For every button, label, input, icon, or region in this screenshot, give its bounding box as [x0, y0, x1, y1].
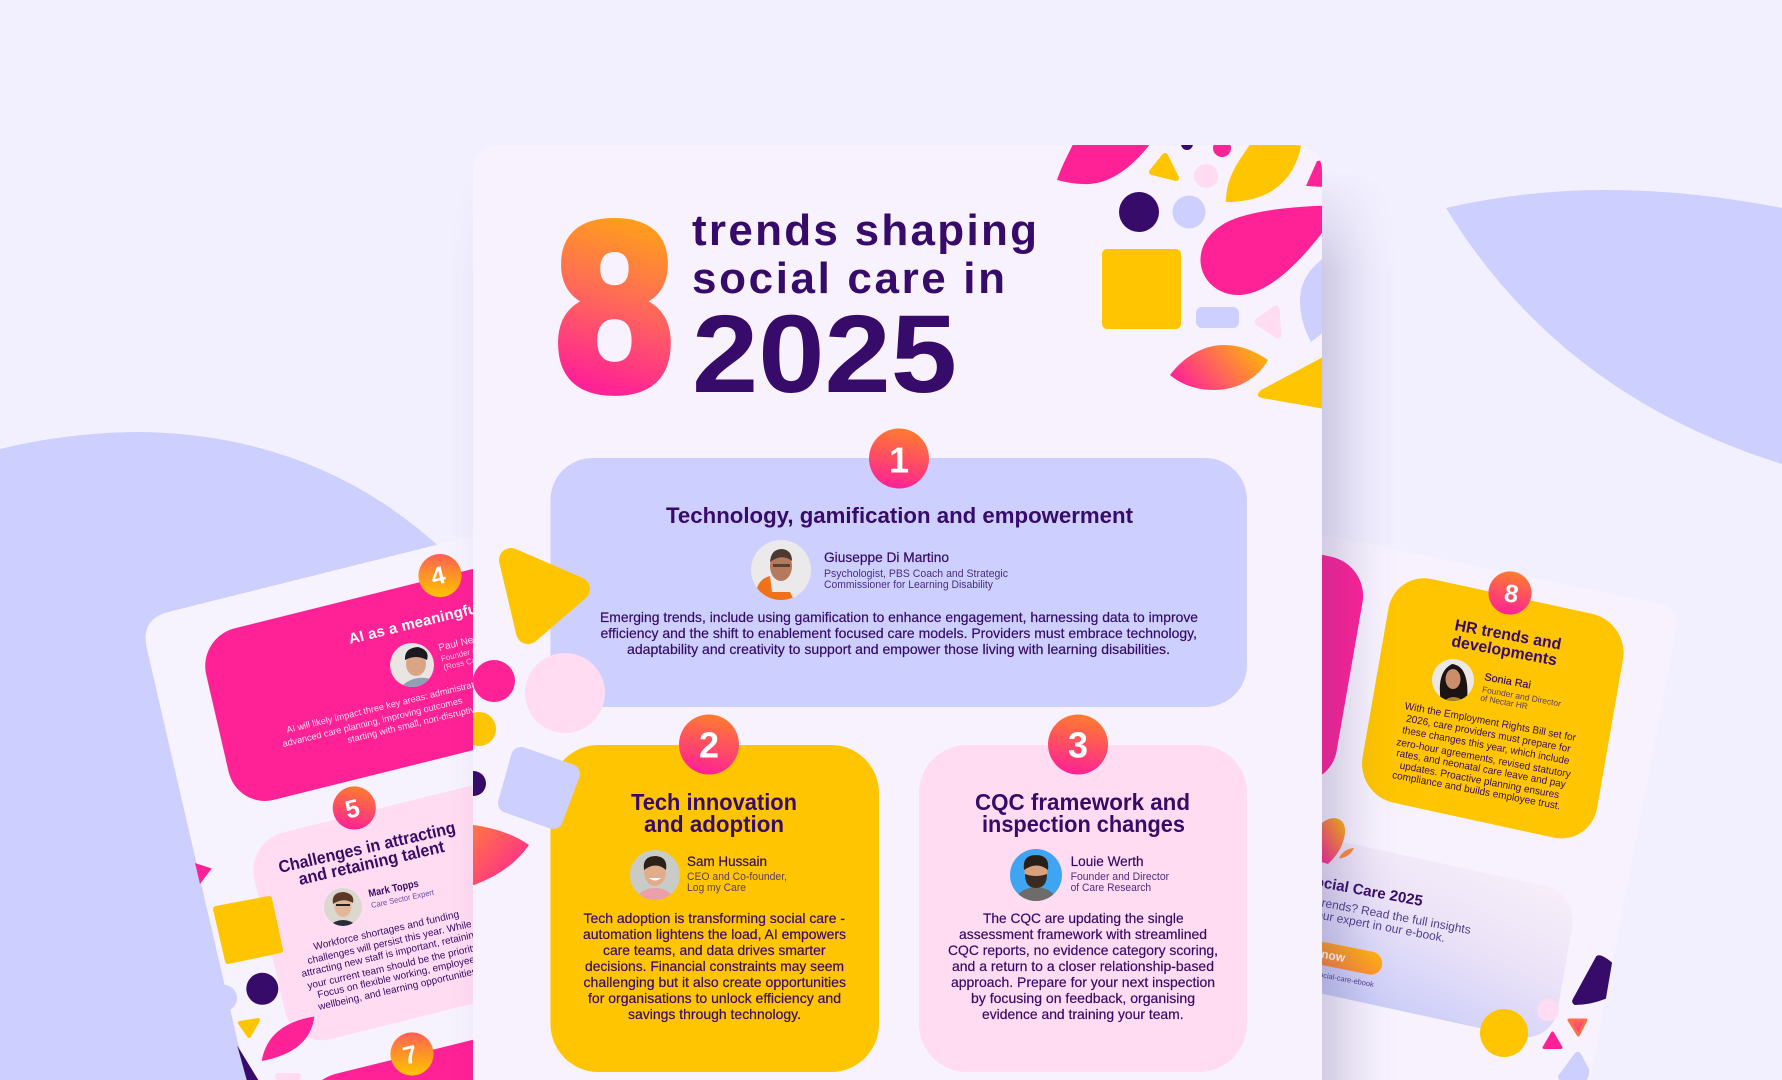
- panel: trend 3: CQC reports, no evidence category scoring,: [948, 942, 1218, 958]
- panel: trend 8 card: [1356, 571, 1629, 846]
- panel: trend 4 card: advanced care planning, improving outcomes: [281, 695, 464, 749]
- panel: trend 7 card: [322, 1038, 480, 1080]
- panel: left tilted document: [146, 544, 473, 1080]
- panel: trend 2: and adoption: [644, 811, 784, 837]
- trend 5 expert: Mark Topps: [367, 878, 420, 900]
- panel: trend 6 card: [1096, 514, 1369, 789]
- trend 2 avatar: [630, 850, 680, 902]
- trend 3 body text: The CQC are updating the single: [983, 910, 1184, 926]
- panel: trend 2: CEO and Co-founder,: [687, 871, 787, 883]
- trend 3 avatar: [1010, 849, 1062, 903]
- panel: trend 4 card: [205, 568, 473, 801]
- badge 7: [390, 1032, 434, 1076]
- panel: trend 2: automation lightens the load, AI empowers: [583, 926, 846, 942]
- badge 8: [1488, 571, 1532, 615]
- call to action button: Download now: [1261, 936, 1347, 965]
- trend 8 heading: HR trends and: [1453, 617, 1563, 654]
- badge 2: 2: [699, 724, 719, 766]
- badge 1: 1: [889, 440, 909, 480]
- panel: trend 3: assessment framework with streamlined: [959, 926, 1207, 942]
- call to action button: [1261, 936, 1384, 977]
- panel: call to action card: [1200, 834, 1578, 1044]
- title: trends shaping: [692, 206, 1037, 255]
- panel: right tilted document: [1096, 514, 1677, 1080]
- title number 8: 8: [550, 180, 679, 442]
- center document shadow: [500, 170, 1345, 1080]
- panel: trend 2: Log my Care: [687, 882, 746, 894]
- title: social care in: [692, 254, 1005, 303]
- trend 5 body text: Workforce shortages and funding: [313, 909, 460, 953]
- left document shapes: [195, 863, 314, 1080]
- badge 4: [418, 554, 462, 597]
- trend 1 avatar: [751, 540, 811, 602]
- badge 1: [869, 428, 929, 488]
- panel: trend 2: care teams, and data drives smarter: [603, 942, 826, 958]
- panel: trend 5 card: Focus on flexible working, employee: [317, 954, 477, 1001]
- panel: trend 4 card: (Ross Care): [443, 653, 487, 672]
- panel: trend 8 card: zero-hour agreements, revised statutory: [1395, 737, 1572, 781]
- panel: trend 1: [550, 428, 1247, 707]
- trend 2 expert: Sam Hussain: [687, 854, 767, 869]
- trend 4 avatar: [390, 643, 434, 687]
- background blob: left: [0, 432, 445, 1080]
- panel: trend 8 card: compliance and builds employee trust.: [1391, 770, 1561, 812]
- top-right decorative shapes: [1057, 138, 1325, 409]
- call to action text: Want to explore these trends? Read the full insights: [1200, 873, 1472, 937]
- panel: trend 4 card: Founder and CEO: [440, 639, 505, 663]
- panel: trend 8 card: of Nectar HR: [1480, 693, 1529, 711]
- panel: trend 3: of Care Research: [1071, 882, 1151, 894]
- trend 3 heading: CQC framework and: [975, 789, 1190, 815]
- panel: trend 1: adaptability and creativity to support and empower those living with learning disabilities.: [627, 641, 1170, 657]
- badge 3: 3: [1068, 724, 1088, 766]
- panel: trend 5 card: [254, 785, 473, 1040]
- trend 8 avatar: [1432, 659, 1474, 702]
- panel: trend 1: Psychologist, PBS Coach and Strategic: [824, 568, 1008, 580]
- panel: trend 2: savings through technology.: [628, 1006, 801, 1022]
- panel: trend 3: by focusing on feedback, organising: [971, 990, 1195, 1006]
- badge 8: 8: [1502, 579, 1521, 609]
- panel: trend 8 card: developments: [1450, 633, 1558, 669]
- panel: trend 8 card: Founder and Director: [1481, 684, 1562, 709]
- panel: trend 2: for organisations to unlock efficiency and: [588, 990, 841, 1006]
- panel: trend 8 card: 2026, care providers must prepare for: [1405, 714, 1572, 755]
- badge 5: [333, 786, 376, 830]
- panel: trend 1: efficiency and the shift to enablement focused care models. Providers must embrace technology,: [600, 625, 1197, 641]
- trend 8 expert: Sonia Rai: [1483, 671, 1532, 692]
- right document shapes: [1315, 818, 1611, 1080]
- badge 7: 7: [400, 1040, 420, 1070]
- trend 5 avatar: [324, 888, 362, 928]
- panel: trend 3: [919, 714, 1247, 1072]
- panel: trend 1: Commissioner for Learning Disability: [824, 579, 993, 591]
- panel: trend 2: [550, 714, 879, 1072]
- panel: trend 8 card: updates. Proactive planning ensures: [1399, 761, 1560, 801]
- trend 1 body text: Emerging trends, include using gamification to enhance engagement, harnessing data to improve: [600, 609, 1198, 625]
- title: 2025: [692, 293, 957, 416]
- panel: trend 5 card: challenges will persist this year. While: [307, 919, 473, 967]
- trend 4 heading: AI as a meaningful: [347, 599, 483, 648]
- trend 4 body text: AI will likely impact three key areas: administration,: [285, 676, 489, 735]
- panel: trend 3: evidence and training your team.: [982, 1006, 1184, 1022]
- trend 4 expert: Paul Newman: [437, 628, 501, 654]
- panel: trend 8 card: rates, and neonatal care leave and pay: [1395, 748, 1567, 791]
- panel: trend 8 card: these changes this year, which include: [1401, 725, 1571, 767]
- trend 5 heading: Challenges in attracting: [277, 818, 457, 877]
- badge 3: [1048, 714, 1108, 774]
- title: [692, 206, 1037, 416]
- trend 3 expert: Louie Werth: [1071, 854, 1144, 869]
- badge 2: [679, 714, 739, 774]
- panel: trend 5 card: attracting new staff is important, retaining: [301, 929, 481, 980]
- panel: trend 3: approach. Prepare for your next inspection: [951, 974, 1215, 990]
- badge 4: 4: [428, 561, 448, 591]
- panel: trend 2: decisions. Financial constraints may seem: [585, 958, 844, 974]
- trend 8 body text: With the Employment Rights Bill set for: [1404, 701, 1577, 744]
- panel: trend 5 card: Care Sector Expert: [370, 888, 435, 910]
- panel: trend 5 card: your current team should be the priority.: [307, 942, 481, 992]
- panel: trend 4 card: starting with small, non-disruptive: [346, 703, 481, 745]
- panel: trend 5 card: wellbeing, and learning opportunities.: [316, 966, 481, 1013]
- panel: call to action card: from our expert in our e-book.: [1288, 902, 1446, 945]
- trend 1 heading: Technology, gamification and empowerment: [666, 503, 1134, 528]
- call to action heading: Trends in Social Care 2025: [1234, 859, 1424, 910]
- panel: trend 3: and a return to a closer relationship-based: [952, 958, 1214, 974]
- panel: trend 3: inspection changes: [982, 811, 1185, 837]
- trend 2 heading: Tech innovation: [631, 789, 797, 815]
- panel: trend 5 card: and retaining talent: [297, 837, 446, 889]
- panel: center document: [473, 145, 1322, 1080]
- panel: trend 2: challenging but it also create opportunities: [584, 974, 846, 990]
- trend 2 body text: Tech adoption is transforming social care -: [584, 910, 845, 926]
- panel: trend 3: Founder and Director: [1071, 871, 1169, 883]
- trend 1 expert: Giuseppe Di Martino: [824, 550, 949, 565]
- background blob: top right: [1446, 190, 1782, 464]
- left edge decorative shapes: [461, 560, 605, 885]
- call to action link: logmycare.co.uk/social-care-ebook: [1259, 959, 1375, 989]
- badge 5: 5: [343, 794, 363, 824]
